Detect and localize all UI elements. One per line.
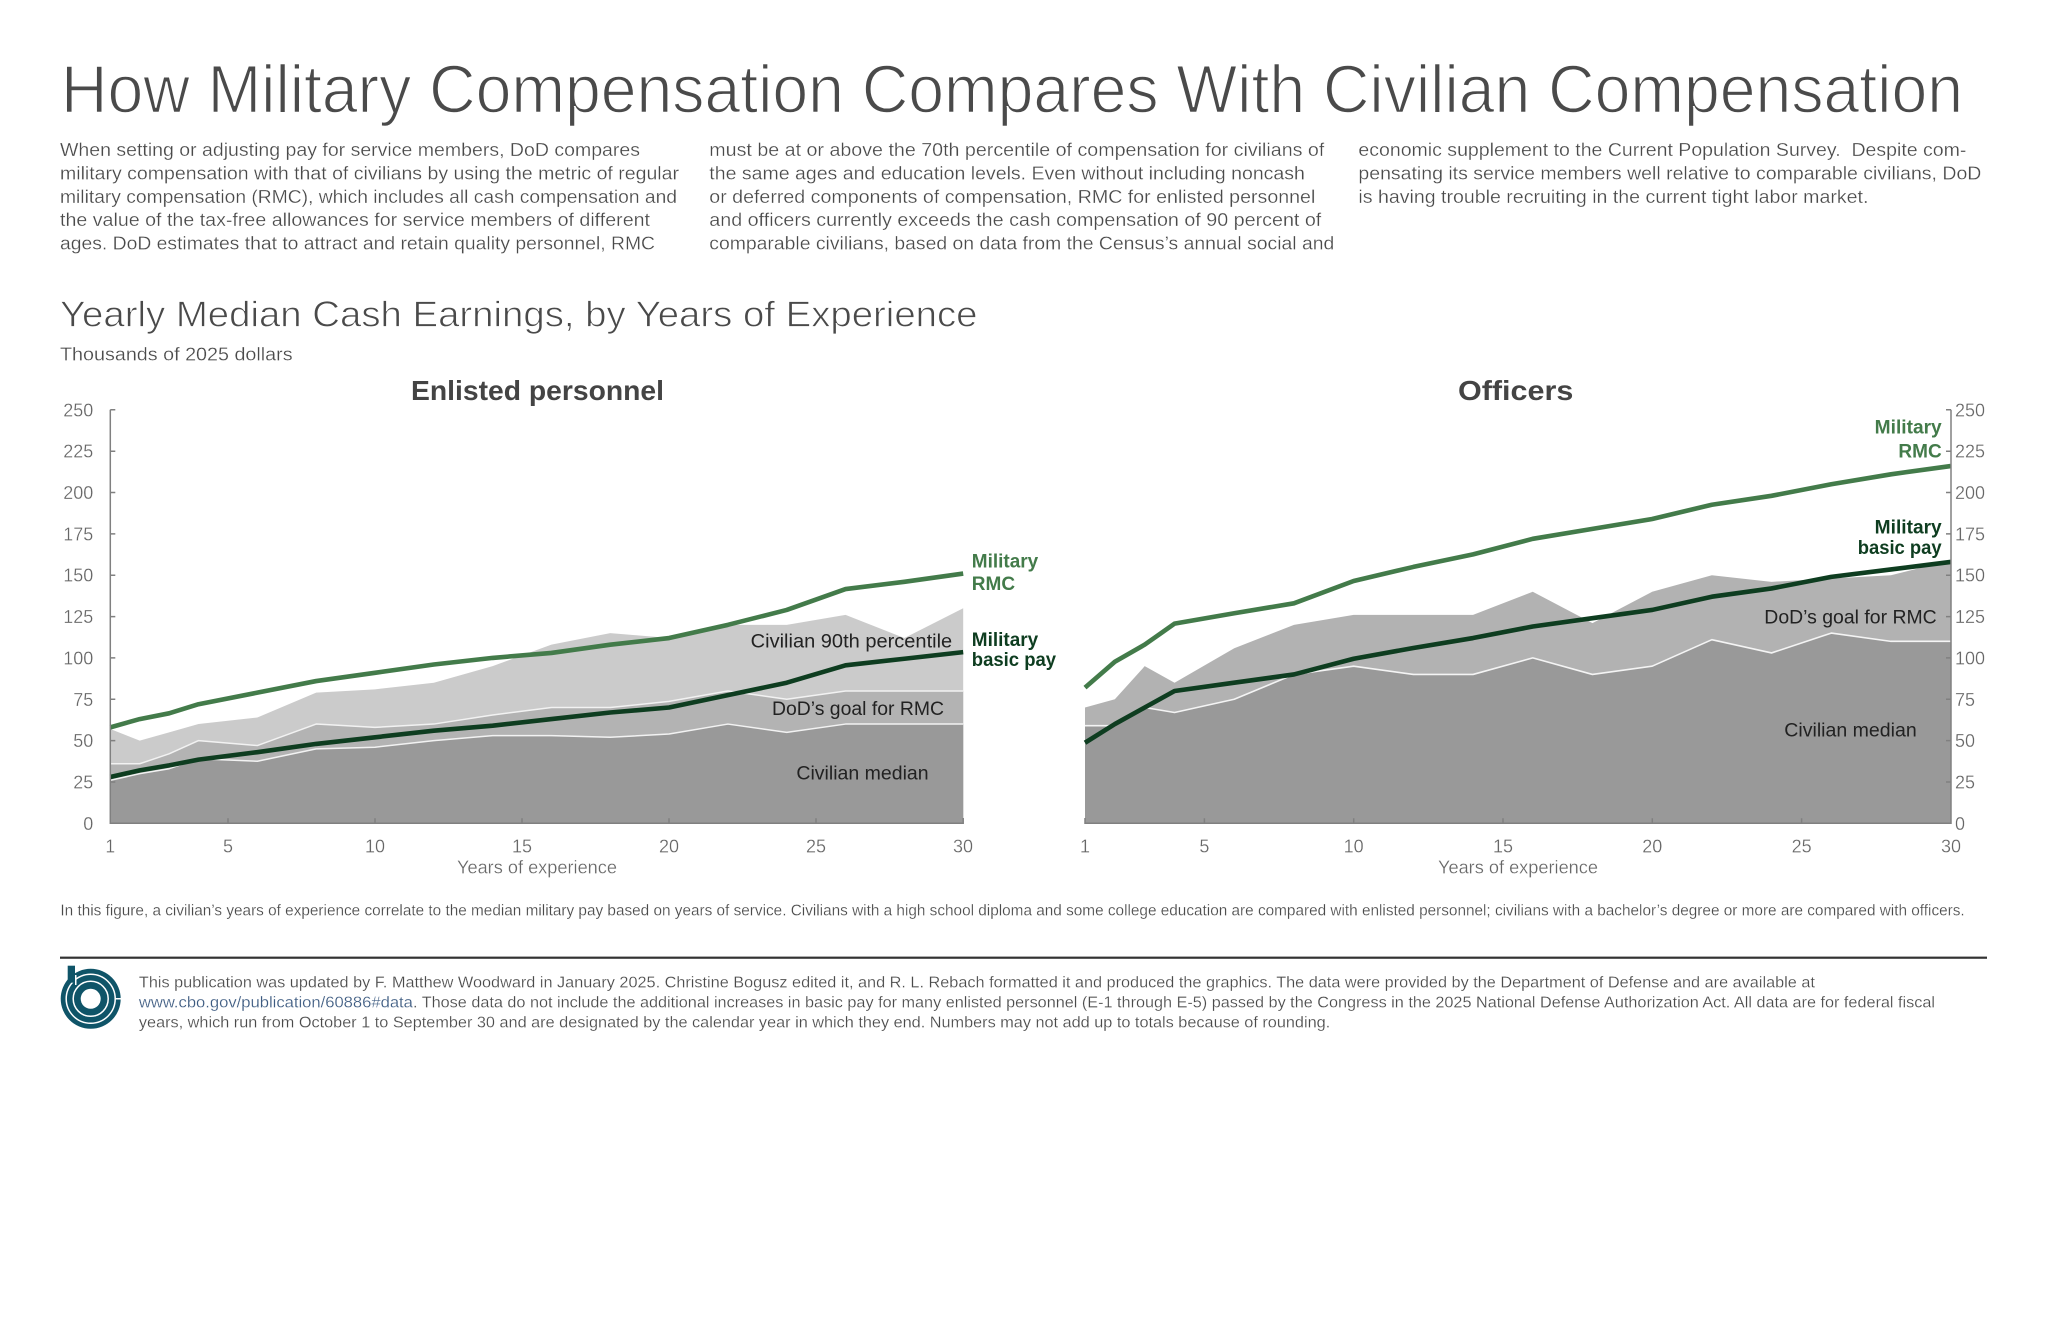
- line: goal band edge: [110, 691, 963, 764]
- credits text: This publication was updated by F. Matthew Woodward in January 2025. Christine Bogusz edited it, and R. L. Rebach formatted it and produced the graphics. The data were provided by the Department of Defense and are available at: [139, 974, 1816, 991]
- panel: officers chart: [1080, 375, 1985, 877]
- credits text: . Those data do not include the additional increases in basic pay for many enlisted personnel (E-1 through E-5) passed by the Congress in the 2025 National Defense Authorization Act. All data are for federal fiscal: [413, 994, 1935, 1011]
- y axis labels: officers: 100: [1955, 648, 1985, 668]
- text block: intro column 2: must be at or above the 70th percentile of compensation for civilians of: [709, 139, 1325, 160]
- label: civilian median: Civilian median: [1784, 721, 1917, 742]
- x axis labels: officers: 20: [1642, 837, 1662, 857]
- figure note: In this figure, a civilian’s years of experience correlate to the median military pay based on years of service. Civilians with a high school diploma and some college education are compared with enlisted personnel; civilians with a bachelor’s degree or more are compared with officers.: [60, 902, 1965, 919]
- label: DoD's goal for RMC: DoD’s goal for RMC: [772, 699, 944, 720]
- x axis labels: officers: 15: [1493, 837, 1513, 857]
- x axis labels: officers: 10: [1344, 837, 1364, 857]
- y axis labels: enlisted: 50: [73, 731, 93, 751]
- text block: intro column 1: military compensation (RMC), which includes all cash compensation and: [60, 186, 677, 207]
- x axis labels: officers: 1: [1080, 837, 1090, 857]
- text block: intro column 3: [1358, 139, 1981, 207]
- y axis labels: officers: 250: [1955, 400, 1985, 420]
- line: military basic pay: [110, 652, 963, 777]
- text block: intro column 1: When setting or adjusting pay for service members, DoD compares: [60, 139, 640, 160]
- y axis labels: enlisted: 200: [63, 483, 93, 503]
- label: military RMC: RMC: [1898, 441, 1942, 462]
- x axis labels: officers: 30: [1941, 837, 1961, 857]
- y axis labels: officers: 25: [1955, 772, 1975, 792]
- label: military RMC: Military: [972, 551, 1039, 572]
- area chart: enlisted bands: [110, 574, 963, 823]
- area: civilian 90th percentile: [110, 608, 963, 823]
- x axis labels: officers: 5: [1199, 837, 1209, 857]
- y axis labels: enlisted: 0: [83, 814, 93, 834]
- y axis labels: officers: 175: [1955, 524, 1985, 544]
- label: military RMC: Military: [1875, 417, 1942, 438]
- line: median band edge: [110, 724, 963, 780]
- label: military basic pay: basic pay: [1858, 538, 1942, 559]
- axes: officers: [1085, 410, 1951, 823]
- area: civilian median: [1085, 633, 1951, 823]
- y axis labels: enlisted: 75: [73, 690, 93, 710]
- x axis labels: enlisted: 30: [953, 837, 973, 857]
- line: military RMC: [110, 574, 963, 727]
- panel: enlisted personnel chart: [63, 375, 1057, 877]
- y axis labels: officers: 150: [1955, 566, 1985, 586]
- y axis labels: enlisted: 100: [63, 648, 93, 668]
- panel heading: officers: Officers: [1458, 375, 1573, 406]
- label: civilian median: Civilian median: [796, 763, 929, 784]
- line: military basic pay: [1085, 562, 1951, 743]
- y axis labels: officers: [1955, 400, 1985, 834]
- chart heading: Yearly Median Cash Earnings, by Years of Experience: [60, 294, 978, 335]
- x axis labels: enlisted: 10: [365, 837, 385, 857]
- label: military basic pay: [972, 630, 1057, 671]
- y axis labels: officers: 125: [1955, 607, 1985, 627]
- credits text: [138, 974, 1935, 1031]
- area chart: officers bands: [1085, 466, 1951, 823]
- x axis labels: officers: [1080, 837, 1961, 857]
- x axis labels: enlisted: 1: [105, 837, 115, 857]
- area: DoD's goal for RMC: [1085, 560, 1951, 823]
- panel heading: enlisted personnel: Enlisted personnel: [411, 375, 664, 406]
- credits text: years, which run from October 1 to September 30 and are designated by the calendar year in which they end. Numbers may not add up to totals because of rounding.: [139, 1014, 1330, 1031]
- text block: intro column 3: economic supplement to the Current Population Survey. Despite com-: [1358, 139, 1966, 160]
- x axis labels: enlisted: 15: [512, 837, 532, 857]
- area: DoD's goal for RMC: [110, 691, 963, 823]
- x axis title: officers: Years of experience: [1438, 857, 1598, 877]
- text block: intro column 1: [60, 139, 679, 254]
- text block: intro column 2: or deferred components of compensation, RMC for enlisted personnel: [709, 186, 1315, 207]
- label: military RMC: [972, 551, 1039, 595]
- line: median band edge: [1085, 633, 1951, 726]
- label: military basic pay: Military: [972, 630, 1039, 651]
- x axis labels: enlisted: 5: [223, 837, 233, 857]
- label: military RMC: RMC: [972, 574, 1015, 595]
- icon: CBO logo: [61, 966, 122, 1029]
- x axis labels: enlisted: 20: [659, 837, 679, 857]
- y axis labels: enlisted: [63, 400, 93, 834]
- y axis labels: officers: 225: [1955, 442, 1985, 462]
- x axis title: enlisted: Years of experience: [457, 857, 617, 877]
- label: military basic pay: [1858, 517, 1942, 559]
- y axis labels: officers: 50: [1955, 731, 1975, 751]
- label: DoD's goal for RMC: DoD’s goal for RMC: [1764, 607, 1937, 628]
- text block: intro column 2: the same ages and education levels. Even without including noncash: [709, 162, 1305, 183]
- x axis labels: enlisted: 25: [806, 837, 826, 857]
- area: civilian median: [110, 724, 963, 823]
- label: military basic pay: Military: [1875, 517, 1942, 538]
- y axis labels: enlisted: 25: [73, 772, 93, 792]
- label: military RMC: [1875, 417, 1942, 462]
- text block: intro column 1: military compensation with that of civilians by using the metric of regular: [60, 162, 679, 183]
- text block: intro column 3: is having trouble recruiting in the current tight labor market.: [1358, 186, 1868, 207]
- text block: intro column 2: and officers currently exceeds the cash compensation of 90 percent of: [709, 209, 1322, 230]
- chart unit note: Thousands of 2025 dollars: [60, 345, 293, 365]
- text block: intro column 3: pensating its service members well relative to comparable civilians, DoD: [1358, 162, 1981, 183]
- y axis labels: enlisted: 150: [63, 566, 93, 586]
- label: military basic pay: basic pay: [972, 650, 1057, 671]
- y axis labels: officers: 0: [1955, 814, 1965, 834]
- y axis labels: enlisted: 250: [63, 400, 93, 420]
- line: military RMC: [1085, 466, 1951, 688]
- y axis labels: officers: 200: [1955, 483, 1985, 503]
- axes: enlisted: [110, 410, 963, 823]
- y axis labels: enlisted: 175: [63, 524, 93, 544]
- y axis labels: officers: 75: [1955, 690, 1975, 710]
- text block: intro column 1: ages. DoD estimates that to attract and retain quality personnel, RMC: [60, 233, 655, 254]
- text block: intro column 2: [709, 139, 1334, 254]
- title: How Military Compensation Compares With Civilian Compensation: [61, 51, 1963, 127]
- credits text: www.cbo.gov/publication/60886#data: [138, 994, 413, 1011]
- x axis labels: officers: 25: [1792, 837, 1812, 857]
- label: civilian 90th percentile: Civilian 90th percentile: [751, 631, 952, 652]
- y axis labels: enlisted: 125: [63, 607, 93, 627]
- x axis labels: enlisted: [105, 837, 973, 857]
- text block: intro column 2: comparable civilians, based on data from the Census’s annual social and: [709, 233, 1334, 254]
- y axis labels: enlisted: 225: [63, 442, 93, 462]
- text block: intro column 1: the value of the tax-free allowances for service members of different: [60, 209, 650, 230]
